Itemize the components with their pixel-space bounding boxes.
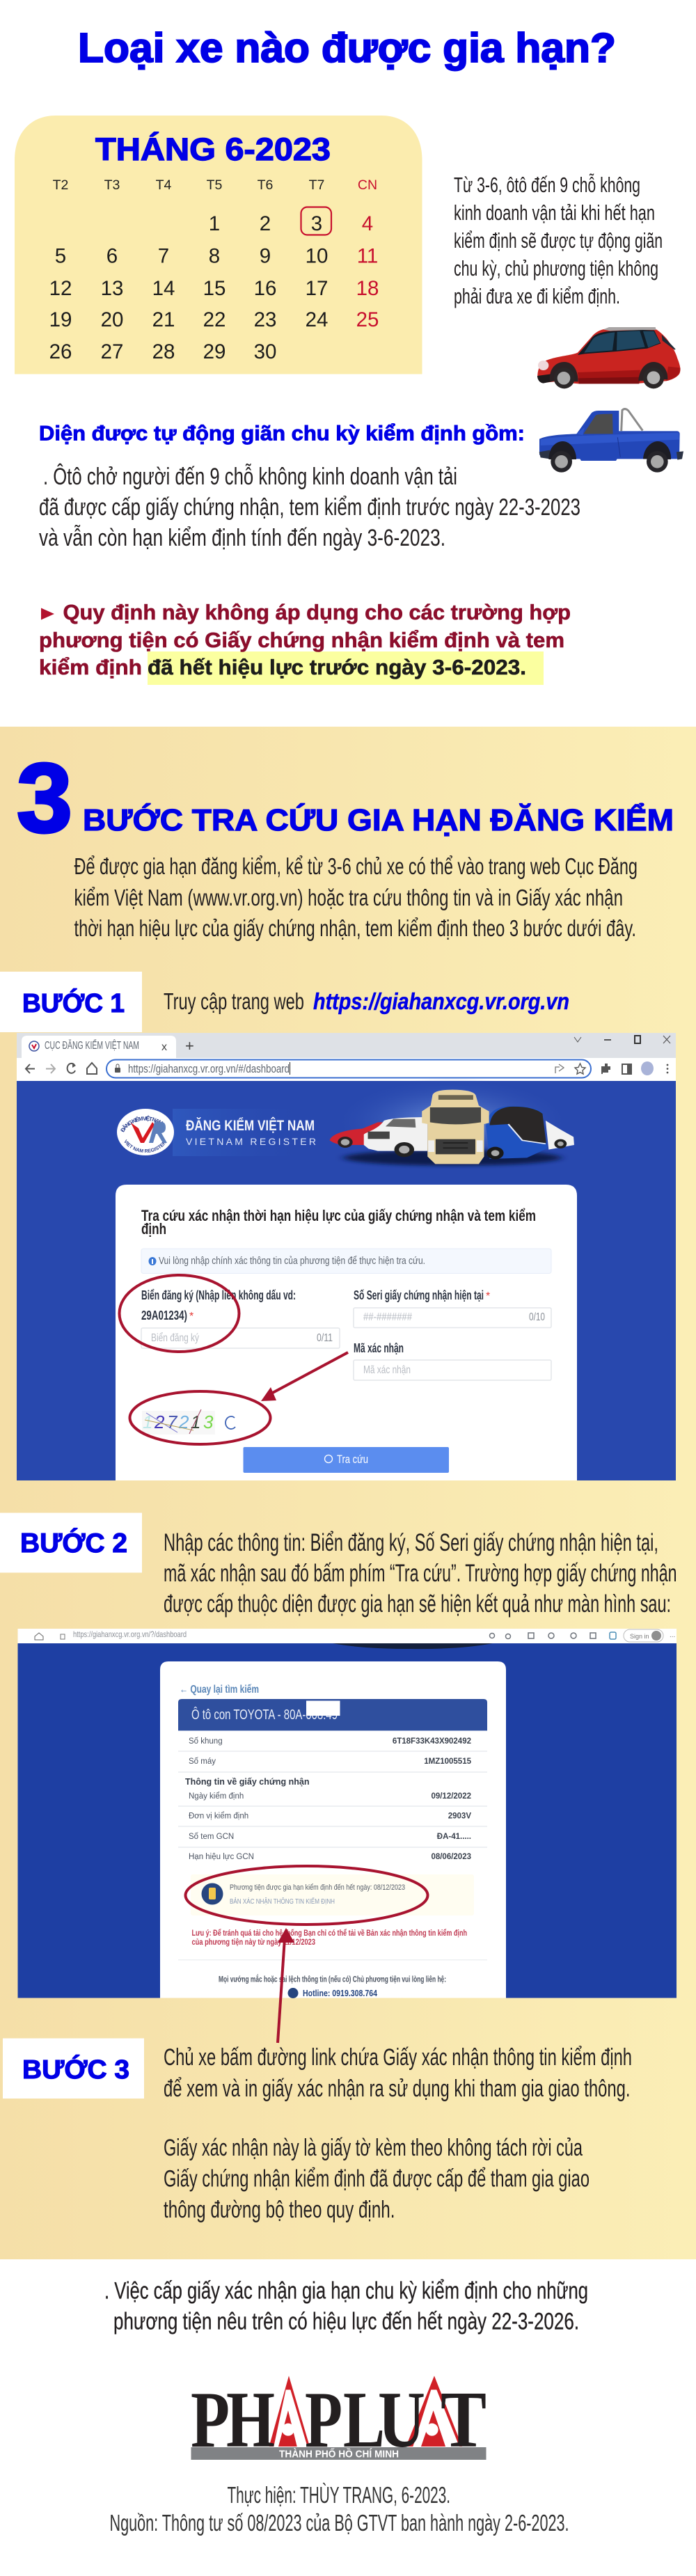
certificate rows: 1MZ1005515 — [424, 1757, 472, 1766]
date grid: 16 — [254, 277, 276, 300]
weekday headers: T5 — [207, 177, 223, 193]
date grid: 6 — [106, 245, 118, 267]
certificate rows: Hạn hiệu lực GCN — [189, 1853, 254, 1861]
red ellipse: plate field — [120, 1275, 239, 1352]
search button — [244, 1447, 449, 1473]
highlight: June 3 — [301, 207, 331, 235]
certificate rows: Số máy — [189, 1757, 216, 1766]
field: plate number: 0/11 — [317, 1332, 333, 1344]
weekday headers: T6 — [258, 177, 273, 193]
contact info: Hotline: 0919.308.764 — [303, 1989, 377, 1998]
date grid: 2 — [260, 212, 271, 235]
date grid: 3 — [311, 212, 322, 235]
extension notice: Phương tiện được gia hạn kiểm định đến hết ngày: 08/12/2023 — [230, 1883, 405, 1892]
logo: Pháp Luật: L — [343, 2376, 385, 2465]
callout: exception: kiểm định — [39, 655, 142, 679]
date grid: 21 — [152, 308, 175, 331]
weekday headers: T7 — [309, 177, 324, 193]
callout: exception: đã hết hiệu lực trước ngày 3-6-2023. — [148, 655, 526, 679]
date grid: 17 — [306, 277, 328, 300]
form card — [116, 1185, 577, 1480]
text block: eligible vehicles: . Ôtô chở người đến 9 chỗ không kinh doanh vận tải — [43, 464, 457, 490]
header vehicle remnant — [333, 1643, 493, 1649]
captcha image: 2 — [178, 1412, 189, 1432]
step 3 text: thông đường bộ theo quy định. — [164, 2197, 395, 2223]
warning note: của phương tiện này từ ngày 11/12/2023 — [192, 1938, 315, 1947]
calendar heading: THÁNG 6-2023 — [95, 132, 331, 167]
vehicle header: Ô tô con TOYOTA - 80A-008.49 — [191, 1707, 338, 1723]
text block: rule summary — [454, 173, 663, 308]
logo: Pháp Luật: H — [226, 2376, 275, 2465]
date grid: 18 — [356, 277, 379, 300]
logo: Vietnam Register seal — [117, 1109, 174, 1155]
field: certificate serial — [354, 1288, 551, 1328]
field: plate number: Biển đăng ký (Nhập liền không dấu vd: — [141, 1288, 296, 1302]
logo band — [173, 1109, 305, 1156]
date grid: 20 — [101, 308, 123, 331]
date grid: 29 — [203, 340, 226, 363]
organization subtitle: VIETNAM REGISTER — [186, 1136, 316, 1147]
weekday headers: T2 — [53, 177, 68, 193]
field: certificate serial: ##-####### — [363, 1311, 412, 1323]
certificate rows: 2903V — [448, 1812, 471, 1821]
date grid: 5 — [55, 245, 66, 267]
certificate rows — [178, 1737, 487, 1861]
browser toolbar: ... — [670, 1631, 675, 1639]
date grid: 12 — [49, 277, 72, 300]
field: captcha code: Mã xác nhận — [354, 1341, 404, 1355]
date grid: 19 — [49, 308, 72, 331]
weekday headers: T3 — [104, 177, 120, 193]
step 2 text — [164, 1529, 677, 1618]
contact info: Mọi vướng mắc hoặc sai lệch thông tin (nếu có) Chủ phương tiện vui lòng liên hệ: — [219, 1975, 446, 1984]
logo: Pháp Luật: P — [191, 2376, 230, 2465]
field: plate number: Biển đăng ký — [151, 1332, 199, 1344]
screenshot: lookup page — [17, 1033, 676, 1480]
icon: red car — [537, 327, 680, 388]
date grid: 1 — [209, 212, 220, 235]
form title: Tra cứu xác nhận thời hạn hiệu lực của giấy chứng nhận và tem kiểm — [141, 1207, 536, 1224]
weekday headers: CN — [358, 177, 377, 193]
captcha image: 2 — [154, 1412, 165, 1432]
date grid: 10 — [306, 245, 328, 267]
field: plate number — [141, 1288, 340, 1348]
browser tab strip: x — [161, 1041, 167, 1053]
date grid: 4 — [362, 212, 373, 235]
text block: rule summary: phải đưa xe đi kiểm định. — [454, 284, 620, 308]
search button: Tra cứu — [337, 1453, 368, 1466]
date grid: 30 — [254, 340, 276, 363]
organization name: ĐĂNG KIỂM VIỆT NAM — [186, 1117, 315, 1134]
logo: Vietnam Register seal: VIET NAM REGISTER — [124, 1139, 166, 1153]
browser tab strip: + — [185, 1037, 194, 1054]
contact info — [219, 1975, 446, 1998]
step 1 text: https://giahanxcg.vr.org.vn — [313, 988, 569, 1014]
certificate rows: Đơn vị kiểm định — [189, 1812, 248, 1821]
logo: Pháp Luật: T — [441, 2376, 487, 2465]
browser toolbar: https://giahanxcg.vr.org.vn/#/dashboard — [128, 1062, 290, 1075]
certificate rows: 6T18F33K43X902492 — [393, 1737, 471, 1746]
date grid: 28 — [152, 340, 175, 363]
info notice — [141, 1249, 551, 1274]
certificate rows: Ngày kiểm định — [189, 1792, 244, 1801]
logo: Pháp Luật — [191, 2376, 487, 2465]
credits: Thực hiện: THÙY TRANG, 6-2023. — [227, 2482, 450, 2508]
heading: big numeral 3: 3 — [17, 743, 72, 853]
date grid: 14 — [152, 277, 175, 300]
callout: exception: Quy định này không áp dụng cho các trường hợp — [63, 600, 571, 624]
credits — [110, 2482, 569, 2536]
step 1 badge — [0, 972, 142, 1032]
warning note: Lưu ý: Để tránh quá tải cho hệ thống Bạn chỉ có thể tải về Bản xác nhận thông tin kiểm định — [192, 1929, 467, 1938]
callout: exception: phương tiện có Giấy chứng nhận kiểm định và tem — [39, 628, 564, 652]
date grid: 26 — [49, 340, 72, 363]
browser tab strip: CỤC ĐĂNG KIỂM VIỆT NAM — [45, 1038, 139, 1052]
captcha image — [142, 1409, 235, 1435]
step 1 text: Truy cập trang web — [164, 988, 304, 1014]
banner vehicles — [330, 1077, 574, 1166]
browser toolbar — [17, 1058, 676, 1081]
info notice: Vui lòng nhập chính xác thông tin của phương tiện để thực hiện tra cứu. — [159, 1255, 425, 1267]
result card — [160, 1661, 506, 1998]
date grid: 23 — [254, 308, 276, 331]
date grid: 24 — [306, 308, 328, 331]
browser toolbar: https://giahanxcg.vr.org.vn/?/dashboard — [73, 1629, 187, 1639]
browser tab strip — [17, 1033, 676, 1058]
heading: three steps: BƯỚC TRA CỨU GIA HẠN ĐĂNG KIỂM — [83, 802, 674, 837]
certificate rows: 08/06/2023 — [431, 1853, 471, 1861]
form title: định — [141, 1220, 166, 1238]
field: plate number: * — [189, 1311, 193, 1322]
callout: exception — [39, 600, 571, 685]
date grid: 25 — [356, 308, 379, 331]
captcha image: 1 — [191, 1412, 200, 1432]
date grid: 11 — [357, 245, 378, 267]
icon: blue pickup truck — [539, 409, 683, 473]
step 2 badge: BƯỚC 2 — [20, 1528, 127, 1558]
form title — [141, 1207, 536, 1238]
heading: eligible group: Diện được tự động giãn chu kỳ kiểm định gồm: — [39, 422, 525, 445]
step 3 badge — [3, 2038, 144, 2099]
logo: Pháp Luật: U — [378, 2376, 425, 2465]
certificate rows: Số tem GCN — [189, 1833, 234, 1841]
panel: three steps section background — [0, 727, 696, 2259]
date grid: 8 — [209, 245, 220, 267]
captcha image: 1 — [143, 1412, 152, 1432]
certificate rows: 09/12/2022 — [431, 1792, 471, 1801]
certificate rows: Số khung — [189, 1737, 223, 1746]
back link: ← Quay lại tìm kiếm — [180, 1684, 259, 1696]
field: captcha code: Mã xác nhận — [363, 1364, 411, 1376]
step 1 badge: BƯỚC 1 — [22, 988, 125, 1018]
arrow: to captcha — [261, 1352, 348, 1401]
text block: validity note — [104, 2277, 588, 2334]
field: plate number: 29A01234) — [141, 1309, 187, 1322]
vehicle header — [178, 1699, 487, 1730]
step 3 text — [164, 2044, 632, 2223]
step 1 text — [164, 988, 569, 1014]
blue page background — [17, 1081, 676, 1480]
date grid: 27 — [101, 340, 123, 363]
red ellipse: extension notice — [185, 1866, 427, 1925]
text block: section intro — [74, 853, 638, 941]
date grid: 9 — [260, 245, 271, 267]
extension notice: BẢN XÁC NHẬN THÔNG TIN KIỂM ĐỊNH — [230, 1897, 335, 1906]
weekday headers — [53, 177, 377, 193]
field: captcha code — [354, 1341, 551, 1380]
date grid: 13 — [101, 277, 123, 300]
panel: calendar — [15, 116, 422, 374]
text block: eligible vehicles — [39, 464, 580, 551]
logo: Vietnam Register seal: ĐĂNG KIỂM VIỆT NAM — [120, 1115, 163, 1132]
field: certificate serial: * — [486, 1290, 490, 1302]
date grid: 15 — [203, 277, 226, 300]
screenshot: result page — [18, 1629, 677, 1998]
captcha image: 3 — [203, 1412, 214, 1432]
text block: eligible vehicles: và vẫn còn hạn kiểm định tính đến ngày 3-6-2023. — [39, 525, 445, 551]
weekday headers: T4 — [156, 177, 172, 193]
red ellipse: captcha — [129, 1391, 270, 1444]
field: certificate serial: 0/10 — [529, 1311, 545, 1323]
title: Loại xe nào được gia hạn? — [78, 25, 616, 71]
warning note — [192, 1929, 467, 1947]
date grid: 7 — [158, 245, 169, 267]
field: certificate serial: Số Seri giấy chứng nhận hiện tại — [354, 1288, 484, 1302]
date grid — [49, 212, 379, 363]
logo: Pháp Luật: P — [305, 2376, 342, 2465]
browser toolbar: Sign in — [630, 1633, 649, 1640]
step 2 badge — [0, 1513, 142, 1573]
step 3 badge: BƯỚC 3 — [22, 2054, 129, 2085]
certificate rows: Thông tin về giấy chứng nhận — [185, 1777, 309, 1787]
captcha image: 7 — [167, 1412, 178, 1432]
extension notice — [191, 1874, 474, 1915]
blue page background — [18, 1643, 677, 1998]
browser toolbar — [18, 1629, 677, 1643]
date grid: 22 — [203, 308, 226, 331]
certificate rows: ĐA-41..... — [437, 1833, 471, 1841]
logo: Pháp Luật: THÀNH PHỐ HỒ CHÍ MINH — [279, 2447, 399, 2460]
arrow: to extension notice — [278, 1928, 294, 2043]
